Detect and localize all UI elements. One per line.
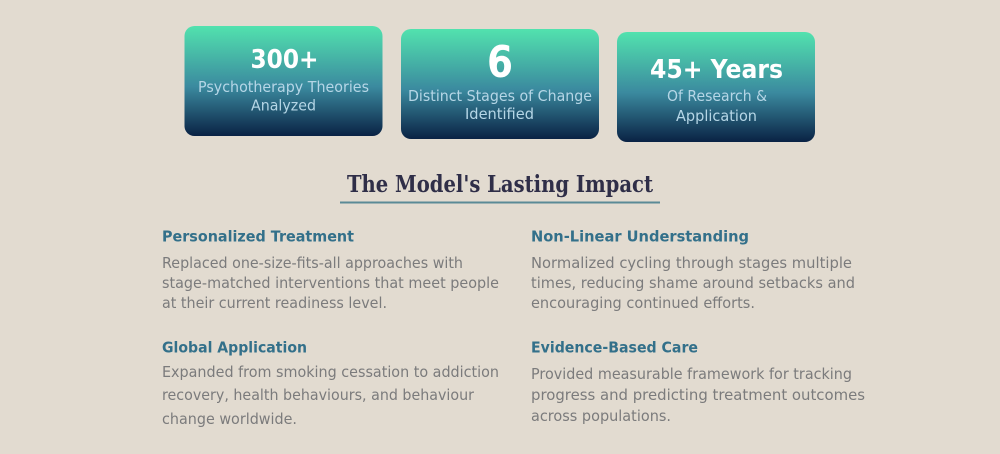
body text: stage-matched interventions that meet people: [162, 274, 499, 292]
body text: [162, 254, 499, 312]
body text: Replaced one-size-fits-all approaches with: [162, 254, 463, 272]
stat card: 45+ years: [617, 32, 815, 142]
impact: non-linear understanding: Non-Linear Understanding: [531, 228, 749, 246]
body text: change worldwide.: [162, 410, 297, 428]
stat number: 300+: 300+: [250, 45, 318, 75]
stat label: stages: Distinct Stages of Change: [408, 87, 592, 105]
impact: global application: Global Application: [162, 338, 307, 356]
impact: evidence-based care: Evidence-Based Care: [531, 338, 698, 356]
section heading: The Model's Lasting Impact: [347, 171, 653, 198]
body text: progress and predicting treatment outcomes: [531, 386, 865, 404]
impact: personalized treatment: [162, 228, 499, 312]
body text: [531, 365, 865, 425]
body text: times, reducing shame around setbacks and: [531, 274, 855, 292]
body text: Expanded from smoking cessation to addiction: [162, 363, 499, 381]
stat label: stages: Identified: [465, 105, 534, 123]
impact: evidence-based care: [531, 338, 865, 425]
body text: [531, 254, 855, 312]
stat card: 300+ theories: [184, 26, 382, 136]
stat label: stages: [408, 87, 592, 123]
stat label: research: [667, 87, 767, 125]
stat label: theories: Psychotherapy Theories: [198, 78, 369, 96]
body text: Provided measurable framework for tracking: [531, 365, 852, 383]
body text: Normalized cycling through stages multiple: [531, 254, 852, 272]
stat number: 45+ years: 45+ Years: [650, 55, 783, 85]
stat label: research: Of Research &: [667, 87, 767, 105]
impact: personalized treatment: Personalized Treatment: [162, 228, 355, 246]
stat number: 6: 6: [487, 37, 513, 88]
stat card: 6 stages: [401, 29, 599, 139]
body text: at their current readiness level.: [162, 294, 387, 312]
impact: non-linear understanding: [531, 228, 855, 312]
stat label: theories: [198, 78, 369, 114]
stat label: research: Application: [676, 107, 757, 125]
body text: recovery, health behaviours, and behaviour: [162, 386, 475, 404]
impact: global application: [162, 338, 499, 428]
stat label: theories: Analyzed: [251, 96, 316, 114]
body text: encouraging continued efforts.: [531, 294, 755, 312]
body text: [162, 363, 499, 428]
body text: across populations.: [531, 407, 671, 425]
